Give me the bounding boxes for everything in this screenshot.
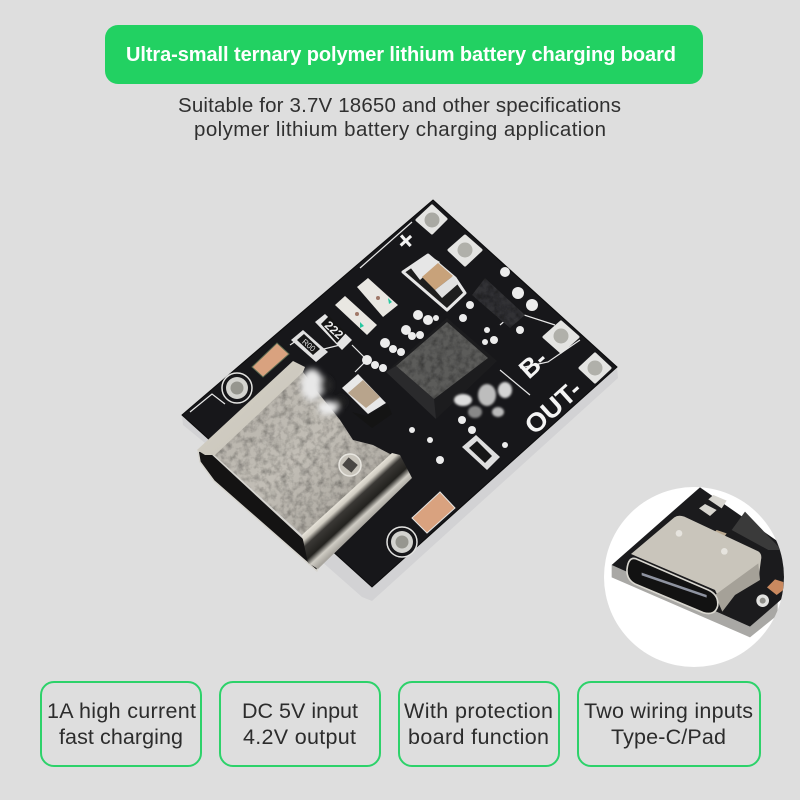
inset rivets bbox=[676, 530, 682, 537]
inset connector opening bbox=[627, 558, 718, 613]
main IC chip bbox=[386, 318, 497, 419]
subtitle: polymer lithium battery charging application bbox=[194, 118, 606, 141]
small resistor pads row bbox=[362, 267, 538, 464]
subtitle bbox=[178, 94, 621, 141]
feature card: wiring inputs: Two wiring inputs bbox=[584, 699, 753, 723]
inset LEDs bbox=[708, 495, 727, 508]
inset pad bbox=[756, 594, 769, 607]
capacitor lower bbox=[342, 374, 392, 428]
feature card: 1A high current: 1A high current bbox=[47, 699, 196, 723]
feature card: protection bbox=[399, 682, 559, 766]
feature card: wiring inputs bbox=[578, 682, 760, 766]
feature card: 1A high current: fast charging bbox=[59, 725, 183, 749]
resistor small: R00 bbox=[300, 337, 318, 354]
front ferrule band bbox=[302, 453, 412, 569]
lower right resistor bbox=[462, 435, 500, 470]
feature card: protection: With protection bbox=[404, 699, 553, 723]
copper pad left bbox=[252, 343, 289, 377]
small black IC bbox=[472, 278, 525, 328]
label: B-: B- bbox=[513, 344, 553, 384]
label: plus: + bbox=[389, 224, 422, 258]
main product photo: charging board bbox=[182, 200, 618, 601]
feature card: protection: board function bbox=[408, 725, 549, 749]
title banner bbox=[105, 25, 703, 84]
highlight smear on shell bbox=[301, 369, 346, 415]
textured top plate bbox=[212, 372, 392, 535]
title banner: Ultra-small ternary polymer lithium battery charging board bbox=[126, 44, 676, 66]
inset IC bbox=[732, 512, 782, 550]
inset contact tongue bbox=[642, 573, 707, 598]
inset board edge bbox=[612, 565, 778, 637]
subtitle: Suitable for 3.7V 18650 and other specifications bbox=[178, 94, 621, 117]
resistor small bbox=[291, 330, 328, 362]
LED 1 bbox=[357, 278, 398, 317]
shell lip bbox=[197, 361, 305, 455]
copper pad right bbox=[412, 492, 455, 533]
resistor 222 bbox=[315, 314, 352, 350]
label: OUT-: OUT- bbox=[518, 374, 588, 440]
capacitor top bbox=[403, 255, 465, 310]
feature card: DC 5V input: DC 5V input bbox=[242, 699, 358, 723]
silkscreen traces bbox=[190, 222, 580, 412]
feature card: wiring inputs: Type-C/Pad bbox=[611, 725, 726, 749]
LED 2 bbox=[335, 296, 377, 335]
blurred smear areas bbox=[454, 382, 512, 418]
inset board surface bbox=[612, 487, 795, 627]
board silver edge bbox=[182, 367, 618, 601]
inset shell top bbox=[631, 516, 762, 594]
feature card: DC 5V input: 4.2V output bbox=[243, 725, 356, 749]
resistor 222: 222 bbox=[322, 318, 346, 342]
USB Type-C connector bbox=[197, 361, 412, 571]
inset copper pad bbox=[767, 579, 783, 595]
feature card: DC 5V input bbox=[220, 682, 380, 766]
inset circle: connector close-up bbox=[604, 487, 795, 667]
board surface bbox=[182, 200, 617, 587]
inset capacitor bbox=[715, 530, 727, 536]
connector opening bbox=[198, 451, 318, 571]
solder holes bbox=[222, 206, 610, 557]
feature card: 1A high current bbox=[41, 682, 201, 766]
crimp hole bbox=[339, 454, 361, 476]
